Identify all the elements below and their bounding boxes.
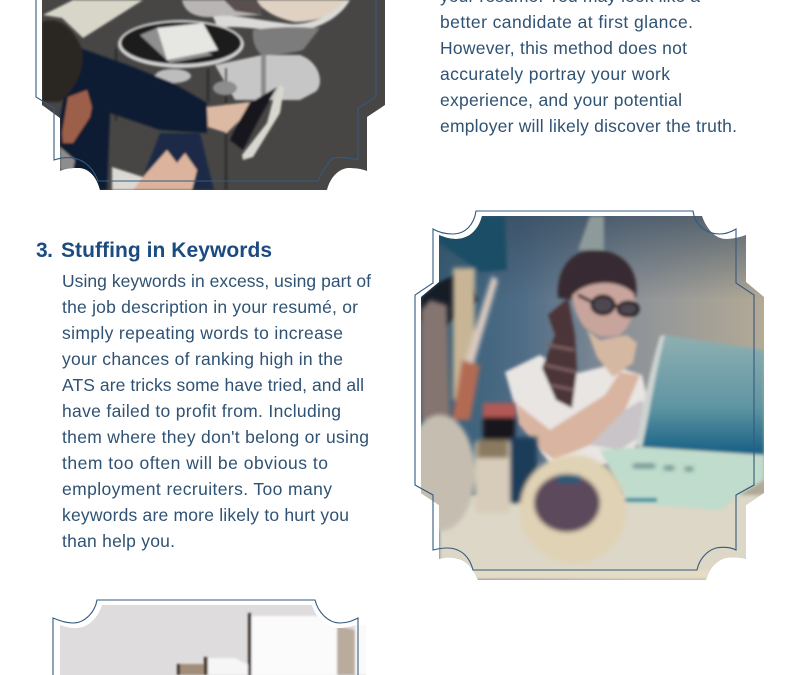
text: continuation of item 2: better candidate at first glance. [440,12,693,32]
text: item 3 body: them too often will be obvious to [62,453,328,473]
text: item 3 body: simply repeating words to increase [62,323,343,343]
pillar [578,216,604,250]
decorative frame [53,600,358,675]
laptop [642,335,764,455]
shoe [230,87,277,150]
hair [558,250,637,300]
beige curtain [337,626,355,675]
hand on head [62,90,92,143]
photo: two people seated by a small table [30,0,390,195]
decorative frame [36,0,376,181]
jar [475,440,510,513]
chair base [215,55,320,100]
white fabric [112,167,143,190]
dark pole [248,613,251,675]
text: item 3 body: your chances of ranking high in the [62,349,343,369]
table legs [116,48,226,190]
pens [483,417,515,440]
hand [587,330,637,377]
text: continuation of item 2: experience, and your potential [440,90,682,110]
leg [60,48,207,190]
text: item 3 body: employment recruiters. Too many [62,479,332,499]
text: item 3 body: Using keywords in excess, using part of [62,271,371,291]
cup [520,455,626,563]
text: continuation of item 2: However, this method does not [440,38,687,58]
arm [518,372,640,460]
text: item 3 body [62,271,371,551]
text: continuation of item 2 [440,0,737,136]
photo: frustrated woman with glasses at laptop [405,210,770,585]
text: continuation of item 2: employer will likely discover the truth. [440,116,737,136]
brushes [453,268,475,400]
hand on knee [133,150,197,190]
hair [42,20,83,102]
right fringe [354,625,366,675]
text: item 3 body: ATS are tricks some have tried, and all [62,375,364,395]
text: item 3 body: them where they don't belong or using [62,427,369,447]
heading: 3. Stuffing in Keywords: 3. [36,239,53,262]
decorative frame [415,211,754,570]
dark shelf [439,216,507,272]
table top [118,20,244,68]
desk [439,495,764,580]
braid [542,298,577,408]
books [140,28,213,63]
text: item 3 body: keywords are more likely to hurt you [62,505,349,525]
chair upholstery [182,0,262,17]
text: continuation of item 2: accurately portray your work [440,64,670,84]
white panel [252,616,338,675]
face [572,283,634,337]
grey sleeve [60,147,75,170]
text: item 3 body: than help you. [62,531,175,551]
photo: light room with chair and white panel [50,600,370,675]
shirt [505,355,652,470]
chair stem [261,55,266,99]
glasses [592,296,638,316]
wall corner [43,0,143,38]
ankle [207,102,250,133]
chair [178,657,208,675]
text: item 3 body: the job description in your resumé, or [62,297,358,317]
brush holder [421,412,478,533]
text: item 3 body: have failed to profit from. Including [62,401,341,421]
keyboard dots [633,466,693,469]
heading: 3. Stuffing in Keywords: Stuffing in Keywords [61,239,272,262]
